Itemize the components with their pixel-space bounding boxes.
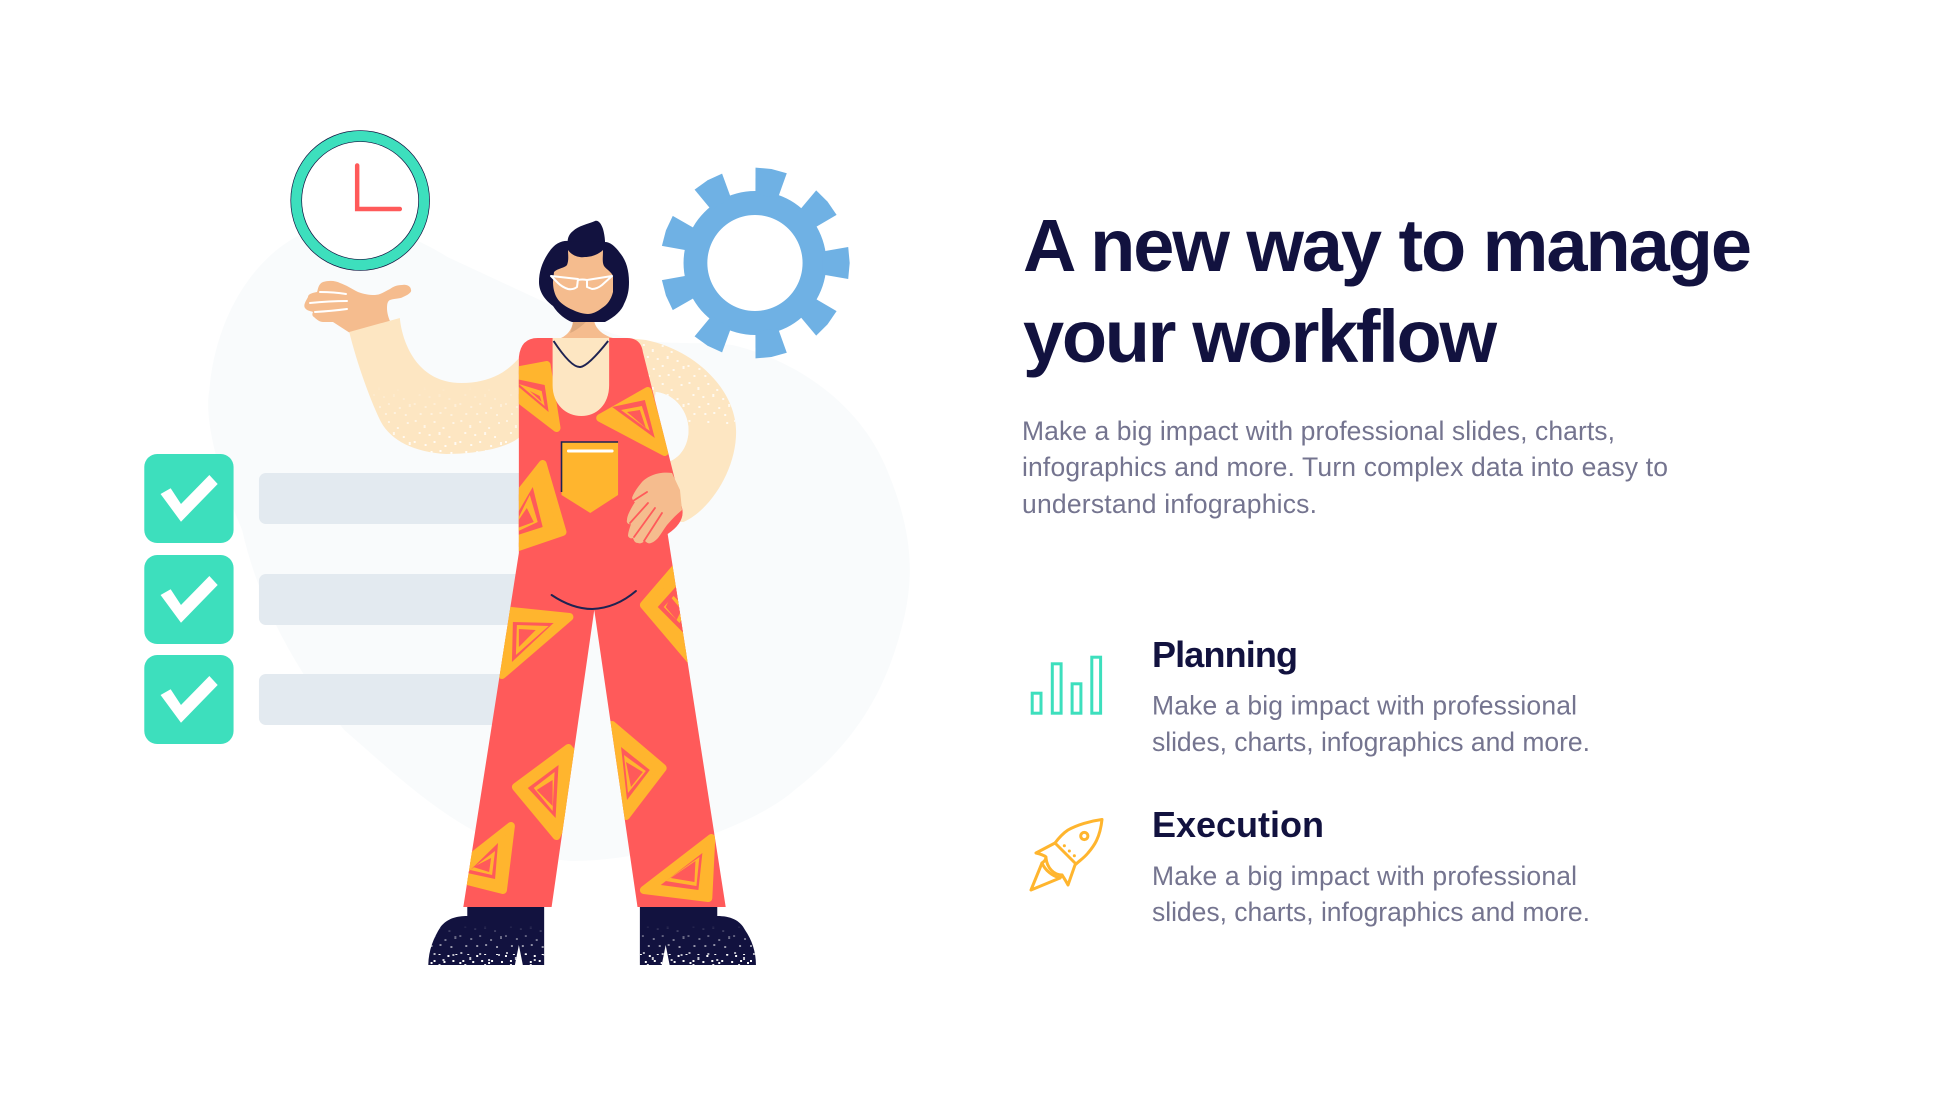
shirt neckline [553,338,609,416]
execution description [1152,861,1590,927]
checkbox 3 [144,655,234,744]
figure: person in overalls [349,318,756,965]
checkbox 1 [144,454,234,543]
planning description: Make a big impact with professional [1152,690,1577,720]
list bar 2 [259,574,527,625]
list bar 1 [259,473,527,524]
title: your workflow [1023,295,1497,378]
intro paragraph: infographics and more. Turn complex data into easy to [1022,452,1668,482]
right arm sleeve [626,338,736,522]
background blob [208,224,910,861]
execution description: slides, charts, infographics and more. [1152,897,1590,927]
intro paragraph: understand infographics. [1022,489,1317,519]
pocket [562,442,618,513]
glasses [551,276,612,289]
overalls triangle pattern [447,365,711,898]
intro paragraph [1022,416,1668,519]
hand on hip [627,473,682,543]
left hand [304,281,411,333]
overalls [463,338,726,907]
intro paragraph: Make a big impact with professional slides, charts, [1022,416,1615,446]
icon: clock [290,130,430,271]
icon: rocket [1031,820,1102,890]
checkbox 2 [144,555,234,644]
planning description: slides, charts, infographics and more. [1152,727,1590,757]
planning description [1152,690,1590,757]
necklace [554,341,608,367]
heading: Planning: Planning [1152,634,1298,675]
belly line [552,591,636,609]
infographic canvas [144,130,1750,965]
right boot [640,907,756,965]
left boot [428,907,544,965]
list bar 3 [259,674,527,725]
execution description: Make a big impact with professional [1152,861,1577,891]
title: A new way to manage [1023,204,1752,287]
left arm sleeve [349,318,522,457]
neck [561,308,613,338]
heading: Execution: Execution [1152,804,1324,845]
icon: gear [661,166,850,360]
illustration backdrop: blob, checklist, clock, gear [144,130,910,861]
hair [539,221,629,322]
title [1023,204,1752,378]
face [553,250,613,314]
icon: bar chart [1032,657,1101,713]
